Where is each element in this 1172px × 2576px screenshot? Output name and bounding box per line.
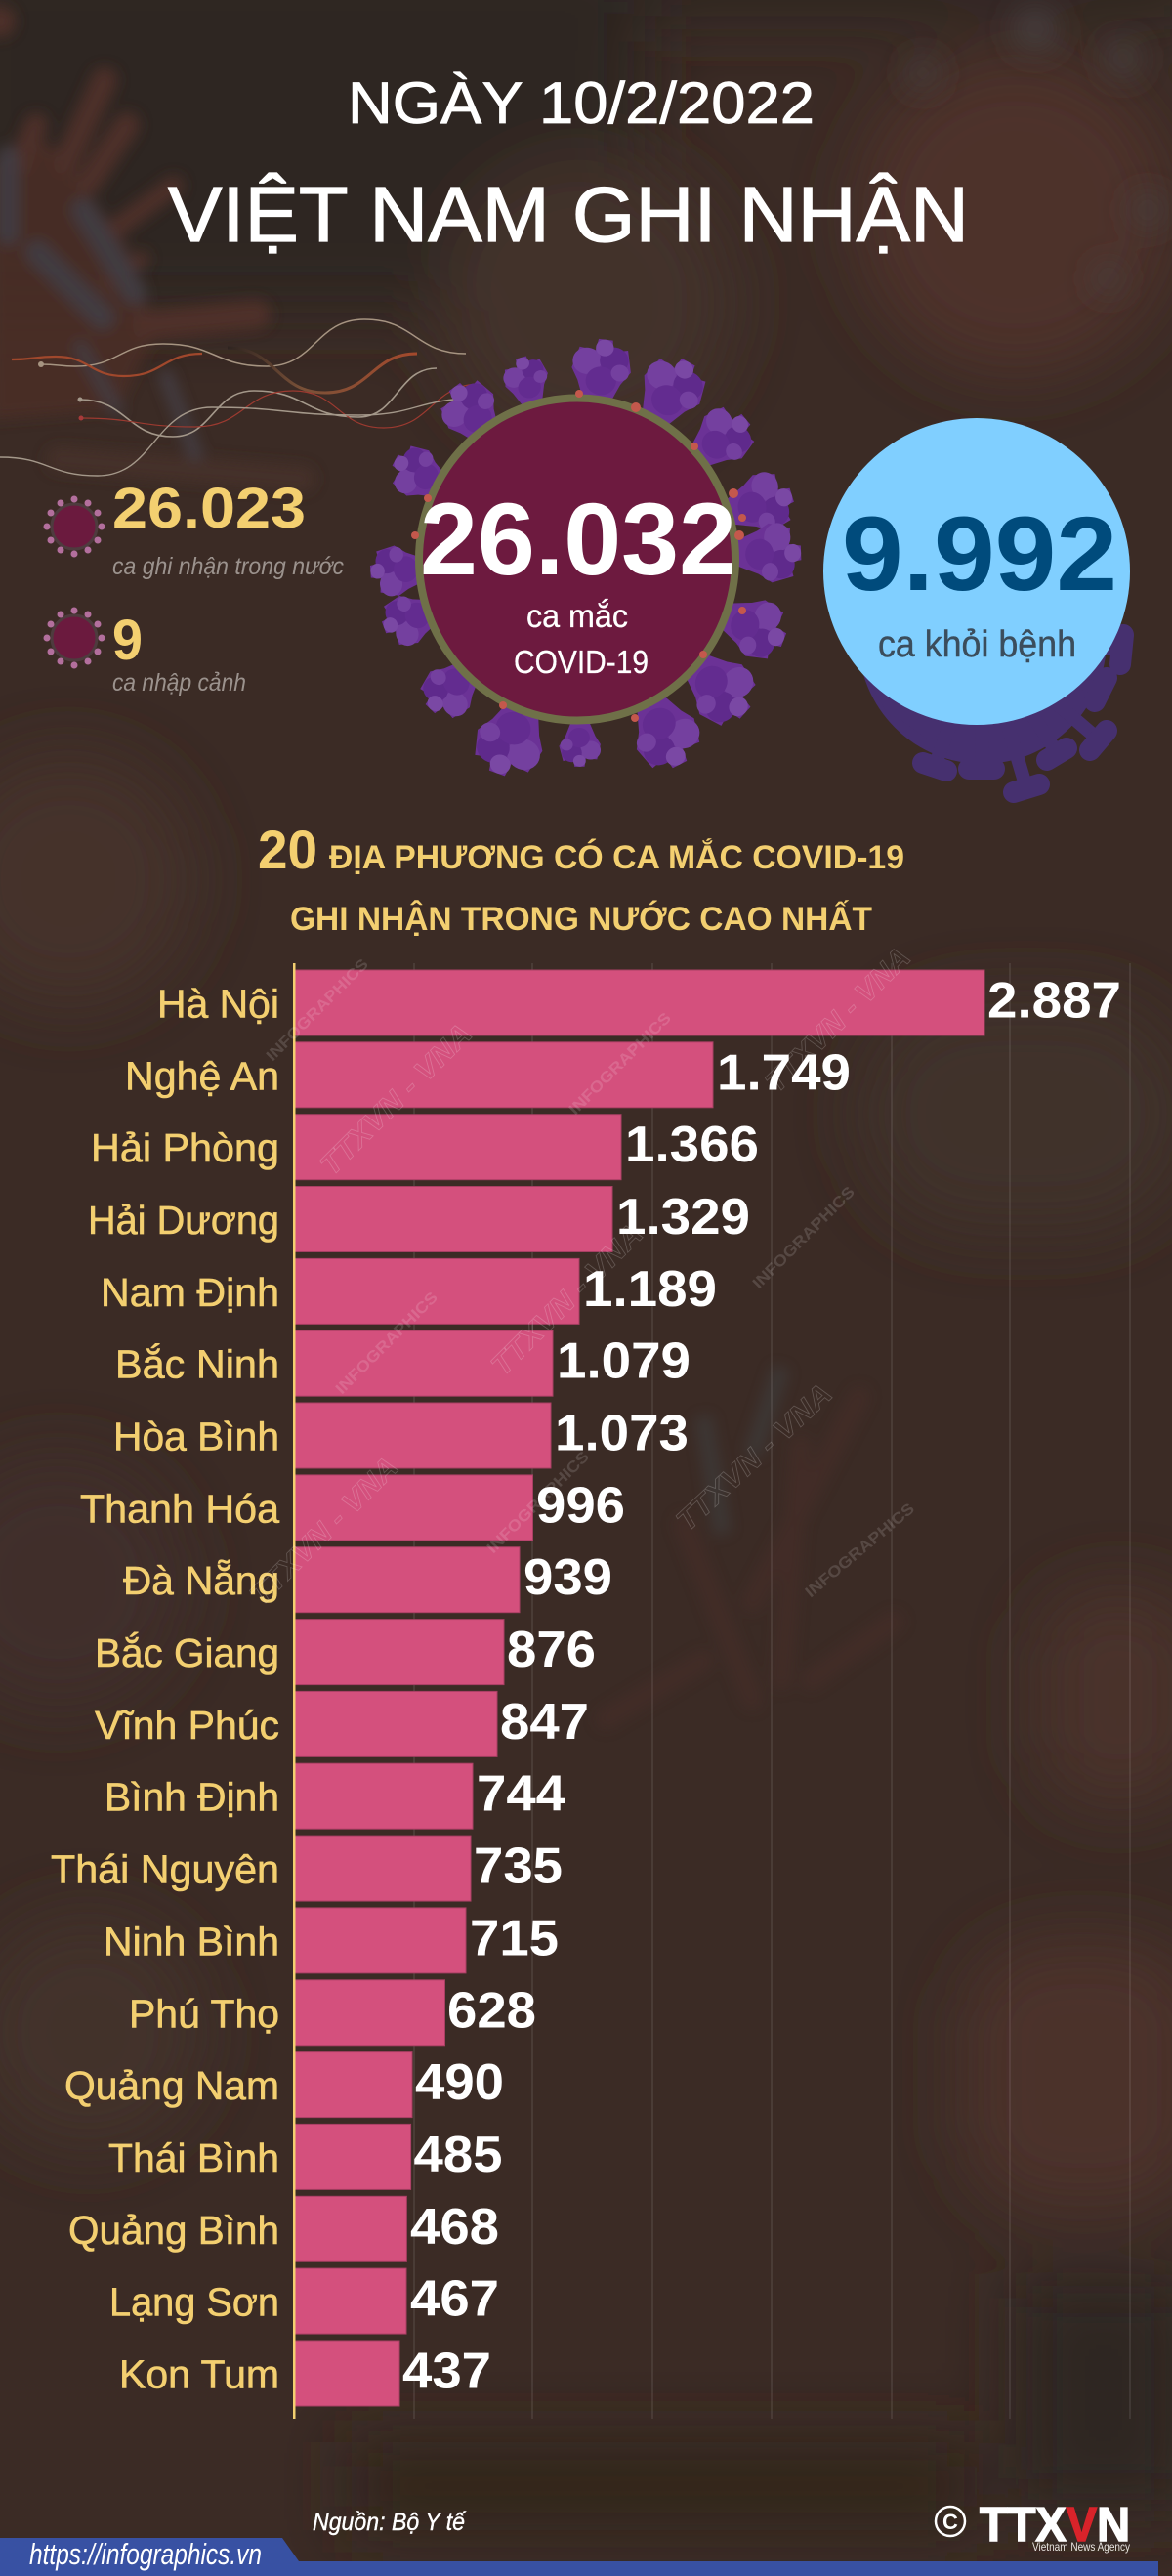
row: Hòa Bình: 1.073 [555, 1405, 689, 1461]
row: Hải Phòng: 1.366 [625, 1117, 759, 1173]
row: Đà Nẵng: 939 [523, 1549, 612, 1606]
row: Thanh Hóa: Thanh Hóa [80, 1486, 279, 1531]
row: Nghệ An: 1.749 [717, 1044, 851, 1101]
recovered circle [823, 418, 1130, 725]
imported caption: ca nhập cảnh [112, 669, 246, 697]
soft right glows [1035, 1587, 1172, 1807]
domestic caption: ca ghi nhận trong nước [112, 553, 344, 580]
panel: left breakdown [43, 477, 344, 697]
recovered number: 9.992 [842, 494, 1117, 612]
imported count: 9 [112, 609, 143, 672]
row: Hà Nội: 2.887 [987, 973, 1121, 1030]
row: Hà Nội: Hà Nội [157, 981, 279, 1026]
row: Phú Thọ: 628 [447, 1982, 536, 2039]
panel: recovered [823, 418, 1130, 792]
watermarks: INFOGRAPHICS [264, 956, 372, 1065]
title: date: NGÀY 10/2/2022 [348, 70, 815, 136]
footer bar [0, 2537, 1158, 2576]
row: Hòa Bình [113, 1403, 689, 1468]
row: Nam Định: 1.189 [583, 1261, 717, 1318]
row: Quảng Bình: Quảng Bình [68, 2208, 279, 2253]
row: Đà Nẵng: Đà Nẵng [123, 1558, 279, 1603]
icon: purple virus behind [858, 516, 1123, 792]
row: Ninh Bình [104, 1908, 559, 1973]
soft left glows [0, 752, 195, 1006]
title: main heading: VIỆT NAM GHI NHẬN [168, 171, 969, 258]
decorative virus strands [0, 319, 481, 476]
row: Kon Tum: 437 [402, 2343, 491, 2399]
chart heading [258, 819, 904, 938]
central mid virus [606, 1368, 894, 1719]
row: Phú Thọ: Phú Thọ [129, 1991, 279, 2036]
row: Quảng Nam [64, 2052, 504, 2118]
row: Kon Tum [119, 2341, 491, 2406]
row: Thanh Hóa [80, 1475, 625, 1541]
row: Thái Nguyên: 735 [474, 1838, 563, 1895]
row: Quảng Nam: Quảng Nam [64, 2063, 279, 2108]
top-left virus [0, 6, 303, 479]
row: Ninh Bình: 715 [470, 1910, 559, 1966]
row: Bắc Giang [95, 1620, 596, 1685]
total caption line 1: ca mắc [526, 598, 628, 634]
row: Hải Dương: Hải Dương [88, 1198, 279, 1243]
row: Bình Định: 744 [477, 1766, 565, 1823]
row: Thái Bình [108, 2124, 502, 2189]
row: Bình Định [105, 1763, 565, 1829]
row: Bắc Giang: 876 [507, 1622, 596, 1678]
icon: small virus domestic [43, 496, 105, 557]
row: Hải Phòng: Hải Phòng [91, 1125, 279, 1170]
row: Quảng Bình [68, 2196, 499, 2261]
domestic count: 26.023 [112, 477, 306, 540]
total caption line 2: COVID-19 [514, 644, 649, 680]
logo: TTXVN: C [942, 2510, 958, 2534]
row: Lạng Sơn: 467 [410, 2271, 499, 2328]
chart heading: 20 [258, 819, 317, 880]
watermarks: TTXVN - VNA [314, 1018, 479, 1182]
virus body [419, 399, 735, 721]
watermarks: TTXVN - VNA [485, 1218, 649, 1382]
row: Kon Tum: Kon Tum [119, 2352, 279, 2397]
row: Thái Bình: 485 [414, 2127, 502, 2183]
row: Nghệ An: Nghệ An [125, 1053, 279, 1098]
row: Nam Định [101, 1258, 717, 1324]
watermarks: INFOGRAPHICS [803, 1500, 918, 1601]
row: Thái Nguyên: Thái Nguyên [51, 1847, 279, 1892]
bar chart [51, 970, 1121, 2406]
row: Hải Dương: 1.329 [616, 1189, 750, 1246]
row: Quảng Nam: 490 [415, 2054, 504, 2111]
row: Vĩnh Phúc: Vĩnh Phúc [95, 1703, 279, 1748]
watermarks: TTXVN - VNA [760, 942, 917, 1099]
watermarks: TTXVN - VNA [244, 1451, 404, 1612]
row: Nghệ An [125, 1042, 851, 1108]
row: Phú Thọ [129, 1980, 536, 2046]
watermarks: INFOGRAPHICS [333, 1289, 441, 1398]
row: Bắc Ninh: Bắc Ninh [115, 1342, 279, 1387]
chart heading: GHI NHẬN TRONG NƯỚC CAO NHẤT [290, 901, 872, 938]
row: Bắc Giang: Bắc Giang [95, 1630, 279, 1675]
row: Nam Định: Nam Định [101, 1270, 279, 1315]
row: Hải Phòng [91, 1115, 759, 1180]
row: Thái Bình: Thái Bình [108, 2135, 279, 2180]
total number: 26.032 [420, 483, 736, 597]
red surface dots [411, 390, 746, 722]
watermarks: INFOGRAPHICS [750, 1184, 858, 1292]
row: Lạng Sơn: Lạng Sơn [109, 2280, 279, 2325]
watermarks [244, 942, 918, 1612]
row: Thái Nguyên [51, 1836, 563, 1901]
blue-grey spots top right [908, 8, 1163, 292]
row: Hải Dương [88, 1186, 750, 1252]
row: Lạng Sơn [109, 2268, 499, 2334]
watermarks: TTXVN - VNA [670, 1377, 839, 1538]
chart heading: ĐỊA PHƯƠNG CÓ CA MẮC COVID-19 [329, 839, 904, 876]
row: Bình Định: Bình Định [105, 1775, 279, 1820]
icon: virus spikes [369, 336, 802, 785]
logo: TTXVN: Vietnam News Agency [1032, 2540, 1130, 2554]
watermarks: INFOGRAPHICS [566, 1010, 675, 1119]
row: Vĩnh Phúc [95, 1691, 589, 1756]
soft top-right glow [855, 54, 1172, 376]
icon: small virus imported [43, 608, 105, 668]
row: Bắc Ninh: 1.079 [557, 1333, 691, 1390]
row: Hà Nội [157, 970, 1121, 1035]
logo: TTXVN: TTXVN [980, 2499, 1130, 2552]
footer bar: https://infographics.vn [29, 2537, 262, 2571]
panel: total cases virus [369, 336, 802, 785]
row: Bắc Ninh [115, 1330, 691, 1396]
watermarks: INFOGRAPHICS [484, 1449, 593, 1557]
source note: Nguồn: Bộ Y tế [313, 2509, 467, 2536]
row: Đà Nẵng [123, 1547, 612, 1613]
row: Hòa Bình: Hòa Bình [113, 1415, 279, 1459]
row: Thanh Hóa: 996 [536, 1477, 625, 1534]
row: Vĩnh Phúc: 847 [500, 1694, 589, 1751]
recovered caption: ca khỏi bệnh [878, 624, 1076, 665]
row: Quảng Bình: 468 [410, 2199, 499, 2256]
row: Ninh Bình: Ninh Bình [104, 1919, 279, 1964]
